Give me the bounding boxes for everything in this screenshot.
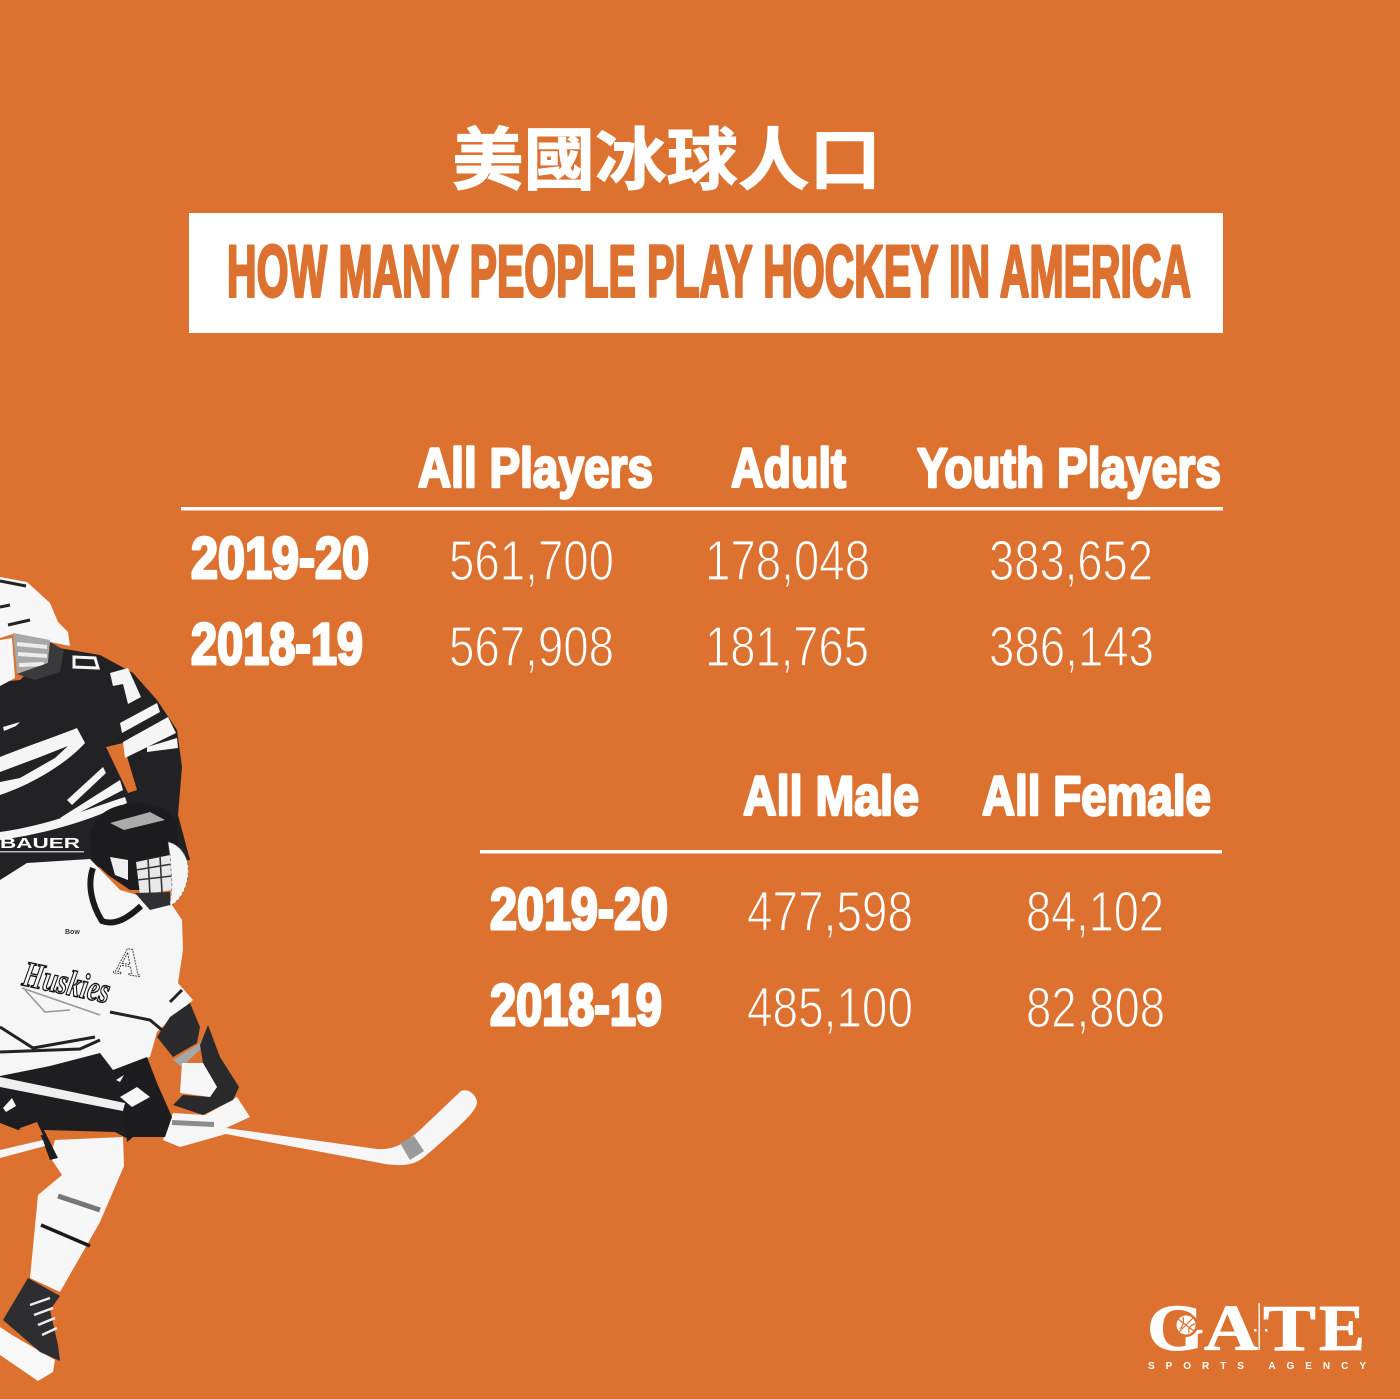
logo: GATE Sports Agency: G: [1147, 1292, 1204, 1365]
elbow pad and right glove: [157, 1003, 200, 1057]
upper player in dark jersey: BAUER: [0, 835, 80, 852]
title: Chinese heading: 美國冰球人口: [452, 123, 881, 199]
legs: [30, 1137, 124, 1292]
icon: basketball: [1174, 1313, 1198, 1337]
jersey number and sleeve stripes: [0, 657, 178, 840]
row 2018-19: [191, 612, 1154, 679]
row 2018-19: 386,143: [989, 615, 1154, 679]
row 2019-20: 2019-20: [490, 877, 668, 942]
logo: GATE Sports Agency: [1147, 1292, 1366, 1372]
lower player in white jersey: [0, 803, 239, 1381]
row 2019-20: [191, 526, 1153, 593]
jersey marks: Bow: [65, 929, 80, 936]
row 2019-20: 477,598: [747, 880, 913, 944]
column headers: Adult: [731, 436, 846, 499]
row 2018-19: 485,100: [747, 976, 913, 1040]
row 2019-20: 84,102: [1026, 880, 1164, 944]
row 2019-20: 178,048: [705, 529, 870, 593]
shorts: [0, 1053, 130, 1160]
stick handle: [0, 1077, 125, 1111]
row 2018-19: 567,908: [449, 615, 614, 679]
column headers: All Male: [743, 764, 919, 827]
collar: [90, 868, 141, 923]
row 2018-19: 82,808: [1026, 976, 1165, 1040]
row 2019-20: 2019-20: [191, 526, 369, 591]
heading banner: English title: [189, 213, 1223, 333]
column headers: Youth Players: [917, 436, 1221, 499]
glove: [113, 1057, 172, 1142]
column headers: [743, 764, 1211, 827]
upper player in dark jersey: [0, 577, 190, 882]
row 2018-19: 181,765: [705, 615, 869, 679]
column headers: All Players: [418, 436, 653, 499]
row 2019-20: 383,652: [989, 529, 1153, 593]
row 2019-20: 561,700: [449, 529, 614, 593]
column headers: [418, 436, 1221, 499]
logo: GATE Sports Agency: E: [1319, 1292, 1365, 1365]
helmet and cage: [90, 803, 178, 890]
logo: GATE Sports Agency: A: [1204, 1292, 1258, 1365]
skate: [0, 1327, 55, 1381]
row 2018-19: [490, 973, 1165, 1040]
row 2019-20: [490, 877, 1164, 944]
stick blade and shaft: [163, 1090, 477, 1165]
column headers: All Female: [982, 764, 1211, 827]
sock stripes: [58, 1196, 100, 1210]
table: players by age group: [181, 436, 1223, 679]
illustration: hockey players: [0, 577, 477, 1381]
logo: GATE Sports Agency: T: [1263, 1292, 1316, 1365]
lower player in white jersey: Huskies: [19, 953, 114, 1011]
lower player in white jersey: A: [112, 939, 145, 985]
row 2018-19: 2018-19: [191, 612, 363, 677]
table: players by gender: [480, 764, 1222, 1040]
jersey body: [0, 859, 193, 1095]
row 2018-19: 2018-19: [490, 973, 662, 1038]
logo: GATE Sports Agency: SPORTS AGENCY: [1148, 1361, 1366, 1372]
